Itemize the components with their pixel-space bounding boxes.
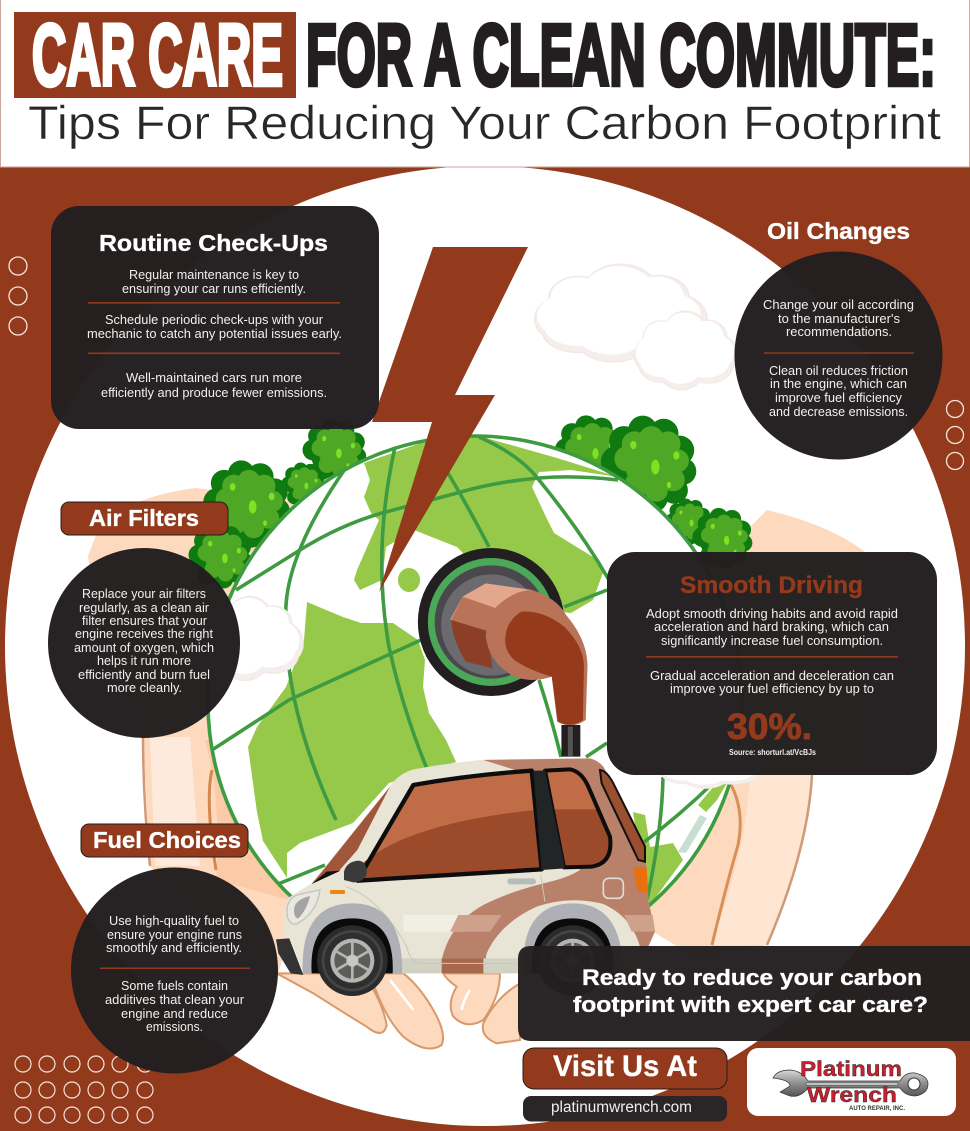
text block: routine 3: efficiently and produce fewer emissions. bbox=[101, 386, 327, 400]
globe land: small island bbox=[398, 568, 420, 592]
illustration: car bbox=[276, 758, 655, 996]
label pill: air filters: Air Filters bbox=[89, 505, 199, 531]
text block: routine 1: Regular maintenance is key to bbox=[129, 268, 299, 282]
text block: air filters body: amount of oxygen, which bbox=[74, 641, 214, 655]
text block: oil 1: to the manufacturer's bbox=[778, 312, 900, 326]
label pill: website bbox=[523, 1096, 727, 1122]
text block: routine 2: mechanic to catch any potential issues early. bbox=[87, 327, 342, 341]
car rear lamp bbox=[634, 867, 648, 893]
car brown swoosh bbox=[442, 758, 655, 973]
illustration: charging plug bbox=[418, 548, 587, 757]
car highlight bands bbox=[402, 915, 655, 973]
car door handle bbox=[507, 878, 536, 884]
logo text: wrench: Wrench bbox=[807, 1084, 897, 1107]
illustration: globe bbox=[207, 435, 743, 971]
text block: routine 3: Well-maintained cars run more bbox=[126, 371, 302, 385]
car rear wheel arch bbox=[523, 903, 623, 973]
title: CAR CARE: CAR CARE bbox=[32, 7, 283, 104]
text block: air filters body: helps it run more bbox=[97, 654, 191, 668]
label pill: fuel choices: Fuel Choices bbox=[93, 827, 241, 853]
car door seam bbox=[346, 875, 545, 963]
globe land: upper continent bbox=[354, 436, 618, 613]
label pill: visit us at: Visit Us At bbox=[553, 1050, 697, 1083]
car headlight bbox=[287, 890, 320, 924]
text block: fuel 2: additives that clean your bbox=[105, 993, 244, 1007]
text block: oil 1: Change your oil according bbox=[763, 298, 914, 312]
text block: fuel 2: emissions. bbox=[146, 1020, 203, 1034]
car front wheel bbox=[317, 925, 388, 996]
statistic: 30%: 30%. bbox=[727, 706, 812, 747]
illustration: right hand bbox=[600, 510, 870, 960]
text block: routine 1: ensuring your car runs efficiently. bbox=[122, 282, 306, 296]
text block: oil 2: and decrease emissions. bbox=[769, 405, 908, 419]
text block: fuel 2: Some fuels contain bbox=[121, 979, 228, 993]
label pill: visit us at bbox=[523, 1048, 727, 1089]
car body bbox=[283, 758, 655, 973]
text block: fuel 2: engine and reduce bbox=[121, 1007, 228, 1021]
panel: call to action bbox=[518, 946, 970, 1041]
text block: smooth 1 bbox=[646, 607, 898, 648]
heading: oil changes: Oil Changes bbox=[767, 218, 910, 244]
car rear window bbox=[545, 769, 610, 867]
panel: fuel choices bbox=[71, 868, 278, 1074]
text block: oil 1: recommendations. bbox=[786, 325, 892, 339]
illustration: left cloud bbox=[196, 596, 303, 681]
globe land: lower continent bbox=[248, 602, 456, 878]
illustration: left hand bbox=[88, 488, 300, 974]
panel: call to action: footprint with expert car care? bbox=[573, 992, 928, 1017]
car front wheel arch bbox=[303, 903, 402, 973]
globe grid lines bbox=[208, 436, 742, 970]
icon: dots bottom left bbox=[15, 1056, 153, 1123]
text block: smooth 2: improve your fuel efficiency by up to bbox=[670, 682, 874, 696]
panel: smooth driving bbox=[607, 552, 937, 775]
text block: oil 2 bbox=[769, 364, 908, 419]
logo text: auto repair: AUTO REPAIR, INC. bbox=[849, 1106, 905, 1112]
text block: air filters body: filter ensures that your bbox=[82, 614, 207, 628]
illustration: clouds upper right bbox=[535, 264, 738, 390]
text block: oil 2: improve fuel efficiency bbox=[775, 391, 903, 405]
logo: platinum wrench bbox=[747, 1048, 956, 1116]
logo wrench icon bbox=[773, 1070, 928, 1096]
title highlight box bbox=[14, 12, 296, 98]
text block: air filters body: regularly, as a clean air bbox=[79, 601, 209, 615]
car turn signal bbox=[330, 890, 345, 894]
text block: fuel 2 bbox=[105, 979, 244, 1034]
illustration: fingers bbox=[277, 973, 520, 1049]
text block: air filters body bbox=[74, 587, 214, 695]
text block: fuel 1: smoothly and efficiently. bbox=[106, 941, 242, 955]
text block: smooth 1: Adopt smooth driving habits and avoid rapid bbox=[646, 607, 898, 621]
text block: air filters body: Replace your air filters bbox=[82, 587, 206, 601]
car fuel cap bbox=[603, 878, 623, 898]
text block: oil 2: Clean oil reduces friction bbox=[769, 364, 908, 378]
illustration: cloud under smooth driving bbox=[656, 740, 763, 789]
car front window bbox=[357, 771, 542, 881]
panel: oil changes bbox=[734, 252, 942, 460]
text block: fuel 1: Use high-quality fuel to bbox=[109, 914, 239, 928]
text block: air filters body: more cleanly. bbox=[107, 681, 182, 695]
text block: fuel 1 bbox=[106, 914, 242, 955]
label pill: fuel choices bbox=[81, 824, 248, 857]
text block: fuel 1: ensure your engine runs bbox=[107, 928, 242, 942]
text block: smooth 1: acceleration and hard braking, which can bbox=[654, 620, 889, 634]
text block: routine 2: Schedule periodic check-ups with your bbox=[105, 313, 323, 327]
text block: smooth 2 bbox=[650, 669, 894, 696]
heading: smooth driving: Smooth Driving bbox=[680, 572, 863, 599]
car mirror bbox=[344, 861, 367, 882]
car bumper bbox=[276, 938, 303, 975]
text block: routine 1 bbox=[122, 268, 306, 296]
text block: routine 2 bbox=[87, 313, 342, 341]
globe land: lower right bbox=[633, 783, 727, 908]
text block: smooth 1: significantly increase fuel consumption. bbox=[661, 634, 883, 648]
illustration: lightning bolt bbox=[372, 247, 528, 592]
text block: routine 3 bbox=[101, 371, 327, 400]
panel: routine check-ups bbox=[51, 206, 379, 429]
label pill: air filters bbox=[61, 502, 228, 535]
text block: oil 2: in the engine, which can bbox=[770, 377, 907, 391]
text block: oil 1 bbox=[763, 298, 914, 339]
subtitle: Tips For Reducing Your Carbon Footprint bbox=[28, 96, 941, 149]
icon: dots left bbox=[9, 257, 27, 335]
car rear wheel bbox=[537, 925, 608, 996]
car rear side window bbox=[600, 770, 645, 862]
source note: Source: shorturl.at/VcBJs bbox=[729, 748, 816, 757]
text block: air filters body: efficiently and burn fuel bbox=[78, 668, 210, 682]
text block: air filters body: engine receives the right bbox=[75, 627, 214, 641]
logo text: platinum: Platinum bbox=[800, 1058, 902, 1081]
icon: dots right bbox=[946, 400, 964, 470]
car front pillar glass bbox=[312, 787, 390, 884]
panel: air filters bbox=[48, 548, 240, 738]
heading: routine check-ups: Routine Check-Ups bbox=[99, 230, 328, 256]
panel: call to action: Ready to reduce your carbon bbox=[582, 965, 922, 990]
text block: smooth 2: Gradual acceleration and deceleration can bbox=[650, 669, 894, 683]
illustration: trees bbox=[188, 415, 752, 588]
label pill: website: platinumwrench.com bbox=[551, 1099, 692, 1116]
car door pillar bbox=[533, 771, 565, 870]
header band bbox=[0, 0, 970, 167]
